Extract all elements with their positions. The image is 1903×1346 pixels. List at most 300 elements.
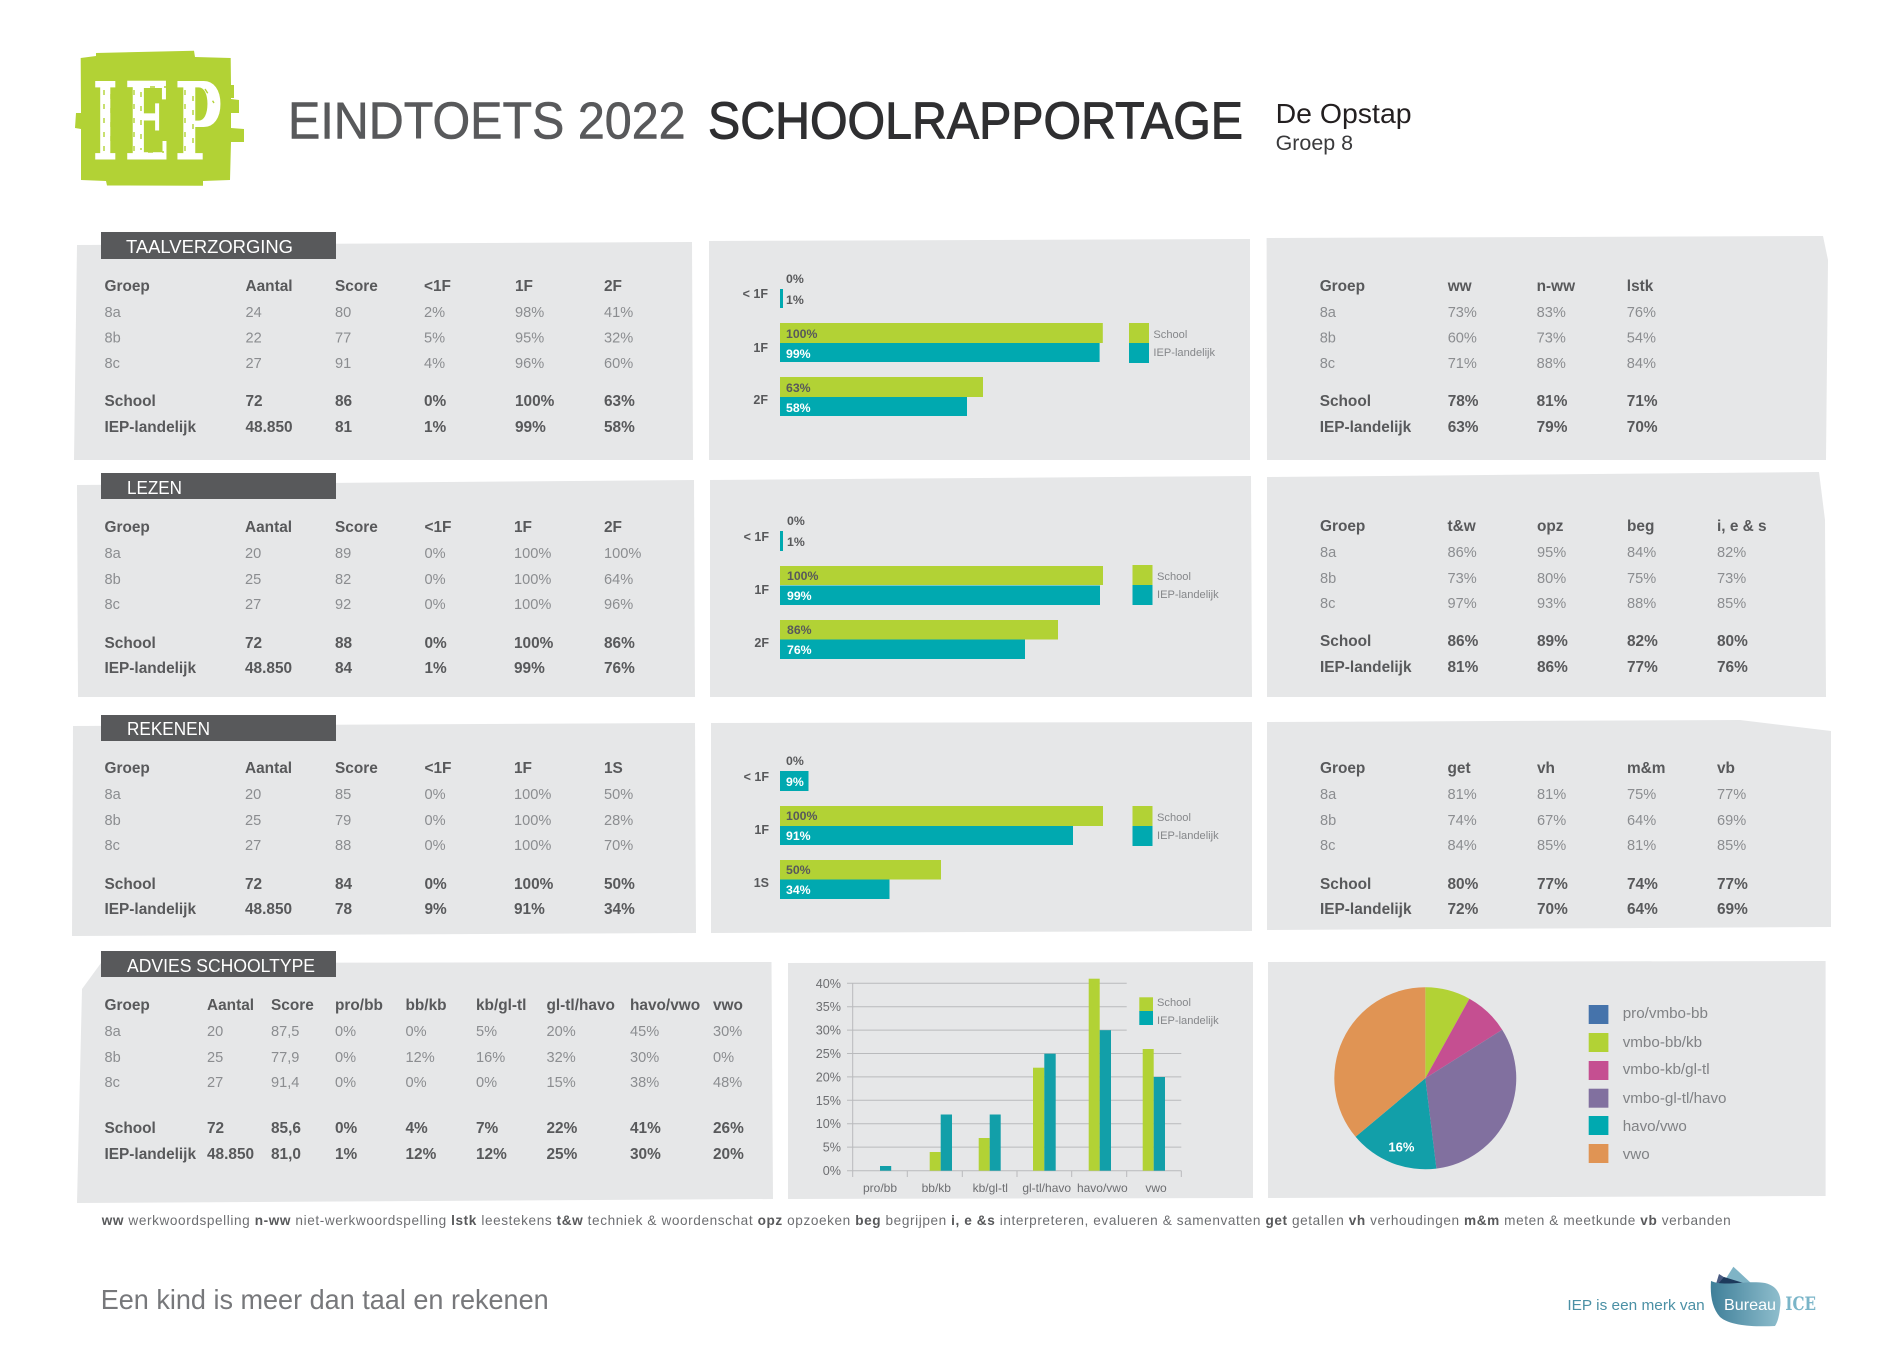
- panel: lezen bar chart: [710, 476, 1252, 697]
- panel: rekenen table: <1F: [424, 760, 451, 777]
- panel: rekenen table: School: [104, 876, 156, 893]
- panel: rekenen table: Aantal: [245, 760, 292, 777]
- panel: advies schooltype table: 30%: [713, 1024, 742, 1040]
- panel: taalverzorging subscores: 8b: [1320, 330, 1336, 346]
- panel: taalverzorging subscores: Groep: [1320, 278, 1365, 295]
- panel: rekenen subscores: 69%: [1717, 813, 1746, 829]
- panel: advies schooltype table: 30%: [630, 1050, 659, 1066]
- panel: advies schooltype table: 8c: [104, 1075, 120, 1091]
- panel: taalverzorging subscores: 8a: [1320, 305, 1337, 321]
- panel: advies schooltype table: 77,9: [271, 1050, 299, 1066]
- panel: lezen table: 100%: [514, 597, 551, 613]
- panel: rekenen subscores: [1267, 720, 1831, 930]
- panel: advies column chart: School: [1157, 997, 1191, 1009]
- panel: rekenen table: 0%: [424, 838, 446, 854]
- brand line and Bureau ICE logo: Bureau: [1724, 1297, 1776, 1314]
- panel: rekenen bar chart: 100%: [786, 809, 818, 823]
- panel: advies schooltype table: 72: [207, 1120, 224, 1137]
- panel: lezen table: 2F: [604, 519, 622, 536]
- panel: taalverzorging table: Groep: [104, 278, 150, 295]
- panel: lezen table: 86%: [604, 635, 635, 652]
- panel: rekenen table: 100%: [514, 813, 551, 829]
- panel: advies schooltype table: 0%: [406, 1024, 427, 1040]
- panel: rekenen subscores: 64%: [1627, 813, 1656, 829]
- panel: rekenen table: 48.850: [245, 901, 292, 918]
- panel: rekenen subscores: 69%: [1717, 901, 1748, 918]
- panel: rekenen table: 0%: [424, 813, 446, 829]
- panel: advies column chart: pro/bb: [863, 1181, 897, 1195]
- panel: rekenen subscores: 8b: [1320, 813, 1336, 829]
- panel: advies column chart: 20%: [816, 1070, 841, 1084]
- panel: rekenen subscores: vb: [1717, 760, 1735, 777]
- school name: De Opstap: [1276, 98, 1412, 129]
- panel: advies schooltype table: [77, 951, 773, 1203]
- panel: advies schooltype table: 91,4: [271, 1075, 299, 1091]
- panel: advies column chart: 40%: [816, 977, 841, 991]
- panel: pie chart: havo/vwo: [1623, 1118, 1687, 1135]
- panel: lezen subscores: [1267, 472, 1826, 697]
- panel: taalverzorging table: 63%: [604, 393, 635, 410]
- panel: lezen table: School: [104, 635, 156, 652]
- panel: rekenen table: 34%: [604, 901, 635, 918]
- panel: advies schooltype table: gl-tl/havo: [546, 997, 615, 1014]
- panel: lezen subscores: 80%: [1717, 633, 1748, 650]
- panel: lezen table: 96%: [604, 597, 633, 613]
- panel: taalverzorging subscores: lstk: [1627, 278, 1654, 295]
- panel: taalverzorging table: 58%: [604, 419, 635, 436]
- panel: taalverzorging table: 60%: [604, 356, 633, 372]
- panel: taalverzorging subscores: ww: [1447, 278, 1472, 295]
- panel: rekenen subscores: 8c: [1320, 838, 1335, 854]
- panel: rekenen bar chart: 0%: [786, 754, 804, 768]
- panel: lezen bar chart: 76%: [787, 643, 812, 657]
- panel: taalverzorging subscores: 60%: [1448, 330, 1477, 346]
- panel: advies schooltype table: 15%: [546, 1075, 576, 1091]
- panel: rekenen table: 8b: [104, 813, 121, 829]
- panel: taalverzorging subscores: 84%: [1627, 356, 1656, 372]
- panel: lezen table: 100%: [514, 635, 554, 652]
- logo: IEP: P: [174, 59, 222, 185]
- panel: lezen table: 8b: [104, 572, 121, 588]
- panel: taalverzorging table: <1F: [424, 278, 451, 295]
- logo: IEP: I: [93, 59, 118, 185]
- panel: advies schooltype table: 25: [207, 1050, 223, 1066]
- panel: lezen subscores: School: [1320, 633, 1371, 650]
- panel: lezen bar chart: 1%: [787, 535, 805, 549]
- panel: rekenen subscores: 84%: [1448, 838, 1477, 854]
- panel: taalverzorging table: 77: [335, 330, 351, 346]
- panel: advies schooltype table: 0%: [713, 1050, 734, 1066]
- panel: lezen subscores: 86%: [1537, 659, 1568, 676]
- panel: taalverzorging subscores: 83%: [1537, 305, 1566, 321]
- panel: advies schooltype table: 48%: [713, 1075, 742, 1091]
- panel: advies schooltype table: havo/vwo: [630, 997, 700, 1014]
- panel: rekenen table: 9%: [424, 901, 447, 918]
- panel: advies schooltype table: 85,6: [271, 1120, 301, 1137]
- panel: lezen bar chart: 86%: [787, 623, 812, 637]
- panel: rekenen table: 84: [335, 876, 353, 893]
- panel: lezen table: Aantal: [245, 519, 292, 536]
- panel: lezen table: 27: [245, 597, 261, 613]
- panel: rekenen table: 100%: [514, 787, 551, 803]
- panel: lezen table: 100%: [514, 572, 551, 588]
- panel: pie chart: vmbo-kb/gl-tl: [1623, 1061, 1710, 1078]
- panel: lezen subscores: 85%: [1717, 596, 1746, 612]
- panel: lezen table: 20: [245, 546, 261, 562]
- panel: lezen table: 84: [335, 660, 353, 677]
- panel: taalverzorging table: 2F: [604, 278, 622, 295]
- panel: advies schooltype table: 7%: [476, 1120, 499, 1137]
- panel: lezen bar chart: IEP-landelijk: [1157, 589, 1219, 601]
- panel: rekenen table: 70%: [604, 838, 633, 854]
- panel: taalverzorging table: 8c: [104, 356, 120, 372]
- panel: rekenen table: 25: [245, 813, 261, 829]
- panel: lezen bar chart: 99%: [787, 589, 812, 603]
- panel: advies schooltype table: bb/kb: [406, 997, 447, 1014]
- panel: advies schooltype table: 25%: [546, 1146, 578, 1163]
- panel: advies column chart: 25%: [816, 1047, 841, 1061]
- panel: advies schooltype table: 45%: [630, 1024, 659, 1040]
- panel: rekenen subscores: 74%: [1448, 813, 1477, 829]
- panel: rekenen table: 28%: [604, 813, 633, 829]
- panel: advies column chart: kb/gl-tl: [973, 1181, 1008, 1195]
- panel: advies column chart: 15%: [816, 1094, 841, 1108]
- panel: lezen table: 0%: [424, 597, 446, 613]
- panel: advies schooltype table: 38%: [630, 1075, 659, 1091]
- panel: advies column chart: bb/kb: [922, 1181, 951, 1195]
- panel: pie chart: [1268, 961, 1826, 1198]
- panel: rekenen subscores: 85%: [1717, 838, 1746, 854]
- panel: lezen table: Groep: [104, 519, 150, 536]
- panel: lezen subscores: 97%: [1448, 596, 1477, 612]
- panel: rekenen bar chart: School: [1157, 812, 1191, 824]
- panel: rekenen subscores: 72%: [1448, 901, 1479, 918]
- panel: advies schooltype table: 12%: [406, 1050, 435, 1066]
- panel: taalverzorging table: 41%: [604, 305, 633, 321]
- panel: taalverzorging bar chart: 1F: [753, 341, 768, 355]
- panel: lezen subscores: 82%: [1627, 633, 1658, 650]
- panel: lezen table: LEZEN: [127, 478, 182, 498]
- panel: taalverzorging subscores: n-ww: [1537, 278, 1575, 295]
- panel: lezen subscores: 81%: [1448, 659, 1479, 676]
- panel: advies schooltype table: 81,0: [271, 1146, 301, 1163]
- panel: taalverzorging table: 98%: [515, 305, 544, 321]
- panel: rekenen subscores: 81%: [1448, 787, 1477, 803]
- panel: advies column chart: gl-tl/havo: [1022, 1181, 1071, 1195]
- panel: rekenen table: 88: [335, 838, 351, 854]
- abbreviation legend: ww werkwoordspelling n-ww niet-werkwoordspelling lstk leestekens t&w techniek & woordenschat opz opzoeken beg begrijpen i, e &s interpreteren, evalueren & samenvatten get getallen vh verhoudingen m&m meten & meetkunde vb verbanden: [101, 1213, 1731, 1228]
- title: EINDTOETS 2022: [288, 92, 686, 150]
- panel: rekenen subscores: 77%: [1537, 876, 1568, 893]
- panel: taalverzorging table: Aantal: [246, 278, 293, 295]
- panel: advies column chart: 5%: [823, 1140, 841, 1154]
- panel: rekenen table: 100%: [514, 876, 554, 893]
- panel: taalverzorging subscores: IEP-landelijk: [1320, 419, 1412, 436]
- panel: lezen table: 100%: [604, 546, 641, 562]
- panel: lezen subscores: 80%: [1537, 571, 1566, 587]
- panel: advies schooltype table: ADVIES SCHOOLTYPE: [127, 956, 315, 976]
- logo: IEP: E: [124, 59, 170, 185]
- panel: taalverzorging table: 100%: [515, 393, 555, 410]
- panel: rekenen bar chart: 1S: [754, 876, 769, 890]
- panel: lezen subscores: 86%: [1448, 633, 1479, 650]
- panel: taalverzorging bar chart: [709, 239, 1250, 460]
- panel: advies schooltype table: vwo: [713, 997, 743, 1014]
- panel: advies schooltype table: 0%: [335, 1024, 356, 1040]
- panel: rekenen table: 91%: [514, 901, 545, 918]
- panel: advies schooltype table: 0%: [335, 1120, 358, 1137]
- panel: rekenen subscores: 67%: [1537, 813, 1566, 829]
- panel: taalverzorging subscores: 54%: [1627, 330, 1656, 346]
- panel: rekenen bar chart: 34%: [786, 883, 811, 897]
- panel: rekenen subscores: 74%: [1627, 876, 1658, 893]
- panel: rekenen subscores: 75%: [1627, 787, 1656, 803]
- panel: advies column chart: 30%: [816, 1024, 841, 1038]
- panel: rekenen table: 72: [245, 876, 262, 893]
- panel: taalverzorging table: 8b: [104, 330, 121, 346]
- panel: lezen subscores: i, e & s: [1717, 518, 1767, 535]
- panel: pie chart: vwo: [1623, 1146, 1650, 1163]
- panel: lezen bar chart: 1F: [754, 583, 769, 597]
- panel: lezen table: 1%: [424, 660, 447, 677]
- panel: lezen table: 82: [335, 572, 351, 588]
- panel: taalverzorging bar chart: School: [1153, 329, 1187, 341]
- logo: IEP: [75, 51, 244, 186]
- panel: rekenen table: 0%: [424, 876, 447, 893]
- panel: rekenen subscores: 81%: [1627, 838, 1656, 854]
- title: [288, 92, 1243, 150]
- panel: lezen subscores: IEP-landelijk: [1320, 659, 1412, 676]
- panel: lezen table: [77, 473, 695, 697]
- panel: rekenen subscores: 81%: [1537, 787, 1566, 803]
- panel: lezen table: 0%: [424, 546, 446, 562]
- panel: advies schooltype table: 0%: [335, 1075, 356, 1091]
- panel: lezen subscores: 75%: [1627, 571, 1656, 587]
- panel: taalverzorging subscores: 71%: [1448, 356, 1477, 372]
- panel: taalverzorging bar chart: 1%: [786, 293, 804, 307]
- panel: taalverzorging subscores: 81%: [1537, 393, 1568, 410]
- panel: lezen subscores: 8c: [1320, 596, 1335, 612]
- panel: rekenen table: REKENEN: [127, 719, 210, 739]
- panel: rekenen bar chart: < 1F: [744, 770, 769, 784]
- panel: advies schooltype table: kb/gl-tl: [476, 997, 526, 1014]
- panel: lezen table: 72: [245, 635, 262, 652]
- panel: pie chart: pro/vmbo-bb: [1623, 1005, 1708, 1022]
- panel: taalverzorging table: 8a: [104, 305, 122, 321]
- panel: rekenen table: 1F: [514, 760, 532, 777]
- panel: lezen table: IEP-landelijk: [104, 660, 196, 677]
- panel: taalverzorging table: 72: [246, 393, 263, 410]
- group name: Groep 8: [1276, 132, 1353, 155]
- panel: advies column chart: havo/vwo: [1077, 1181, 1128, 1195]
- panel: rekenen table: 79: [335, 813, 351, 829]
- panel: advies schooltype table: 8a: [104, 1024, 122, 1040]
- panel: rekenen table: 20: [245, 787, 261, 803]
- panel: rekenen bar chart: [711, 722, 1252, 933]
- panel: rekenen table: 1S: [604, 760, 623, 777]
- panel: lezen bar chart: < 1F: [744, 530, 769, 544]
- panel: taalverzorging table: 81: [335, 419, 353, 436]
- panel: taalverzorging table: 95%: [515, 330, 544, 346]
- panel: taalverzorging subscores: 78%: [1448, 393, 1479, 410]
- panel: taalverzorging table: School: [104, 393, 156, 410]
- panel: advies schooltype table: Score: [271, 997, 314, 1014]
- panel: taalverzorging subscores: 63%: [1448, 419, 1479, 436]
- panel: advies schooltype table: 20%: [546, 1024, 576, 1040]
- panel: taalverzorging subscores: 71%: [1627, 393, 1658, 410]
- panel: taalverzorging table: 96%: [515, 356, 544, 372]
- panel: advies schooltype table: Aantal: [207, 997, 254, 1014]
- panel: taalverzorging table: TAALVERZORGING: [126, 237, 293, 257]
- panel: rekenen subscores: 85%: [1537, 838, 1566, 854]
- panel: taalverzorging table: IEP-landelijk: [104, 419, 196, 436]
- panel: taalverzorging subscores: 79%: [1537, 419, 1568, 436]
- panel: taalverzorging table: 27: [246, 356, 262, 372]
- title: SCHOOLRAPPORTAGE: [708, 92, 1243, 150]
- panel: lezen subscores: 77%: [1627, 659, 1658, 676]
- panel: lezen table: 100%: [514, 546, 551, 562]
- panel: advies schooltype table: 12%: [476, 1146, 507, 1163]
- panel: lezen table: 88: [335, 635, 353, 652]
- panel: advies schooltype table: School: [104, 1120, 156, 1137]
- panel: rekenen subscores: vh: [1537, 760, 1555, 777]
- panel: advies schooltype table: 26%: [713, 1120, 744, 1137]
- panel: advies column chart: IEP-landelijk: [1157, 1015, 1219, 1027]
- panel: taalverzorging table: 32%: [604, 330, 633, 346]
- panel: taalverzorging table: [74, 232, 693, 460]
- panel: lezen subscores: 8b: [1320, 571, 1336, 587]
- panel: rekenen subscores: Groep: [1320, 760, 1365, 777]
- panel: rekenen bar chart: IEP-landelijk: [1157, 830, 1219, 842]
- tagline: Een kind is meer dan taal en rekenen: [101, 1284, 549, 1315]
- panel: taalverzorging table: 1%: [424, 419, 447, 436]
- brand line and Bureau ICE logo: [1567, 1267, 1816, 1326]
- panel: taalverzorging table: 80: [335, 305, 351, 321]
- panel: lezen subscores: 93%: [1537, 596, 1566, 612]
- panel: lezen table: Score: [335, 519, 378, 536]
- panel: rekenen bar chart: 1F: [754, 823, 769, 837]
- panel: taalverzorging bar chart: 99%: [786, 347, 811, 361]
- panel: advies schooltype table: Groep: [104, 997, 150, 1014]
- panel: lezen subscores: beg: [1627, 518, 1654, 535]
- panel: lezen table: 99%: [514, 660, 545, 677]
- panel: advies schooltype table: 0%: [476, 1075, 497, 1091]
- panel: lezen subscores: 88%: [1627, 596, 1656, 612]
- panel: lezen subscores: Groep: [1320, 518, 1365, 535]
- panel: taalverzorging bar chart: 58%: [786, 401, 811, 415]
- panel: rekenen table: Groep: [104, 760, 150, 777]
- panel: rekenen table: Score: [335, 760, 378, 777]
- panel: advies schooltype table: 41%: [630, 1120, 661, 1137]
- panel: rekenen subscores: 8a: [1320, 787, 1337, 803]
- panel: rekenen subscores: 70%: [1537, 901, 1568, 918]
- panel: advies schooltype table: 12%: [406, 1146, 437, 1163]
- panel: taalverzorging bar chart: 0%: [786, 272, 804, 286]
- panel: taalverzorging subscores: 8c: [1320, 356, 1335, 372]
- panel: taalverzorging table: 99%: [515, 419, 546, 436]
- panel: lezen table: <1F: [424, 519, 451, 536]
- panel: taalverzorging bar chart: 63%: [786, 381, 811, 395]
- panel: lezen table: 89: [335, 546, 351, 562]
- panel: taalverzorging table: 91: [335, 356, 351, 372]
- panel: rekenen subscores: get: [1448, 760, 1471, 777]
- panel: lezen table: 0%: [424, 635, 447, 652]
- panel: taalverzorging table: 22: [246, 330, 262, 346]
- panel: advies schooltype table: 20%: [713, 1146, 744, 1163]
- panel: rekenen table: 0%: [424, 787, 446, 803]
- panel: taalverzorging bar chart: < 1F: [743, 287, 768, 301]
- panel: pie chart: 16%: [1388, 1140, 1415, 1155]
- panel: advies column chart: [788, 962, 1253, 1199]
- panel: advies schooltype table: 16%: [476, 1050, 505, 1066]
- panel: lezen table: 64%: [604, 572, 633, 588]
- panel: lezen subscores: 76%: [1717, 659, 1748, 676]
- panel: rekenen table: IEP-landelijk: [104, 901, 196, 918]
- panel: rekenen subscores: School: [1320, 876, 1371, 893]
- brand line and Bureau ICE logo: IEP is een merk van: [1567, 1297, 1705, 1314]
- panel: advies schooltype table: 32%: [546, 1050, 576, 1066]
- panel: rekenen subscores: 77%: [1717, 787, 1746, 803]
- panel: taalverzorging subscores: [1267, 236, 1828, 460]
- panel: taalverzorging table: Score: [335, 278, 378, 295]
- panel: advies schooltype table: IEP-landelijk: [104, 1146, 196, 1163]
- panel: taalverzorging table: 2%: [424, 305, 445, 321]
- panel: advies column chart: 10%: [816, 1117, 841, 1131]
- panel: advies schooltype table: 0%: [406, 1075, 427, 1091]
- panel: rekenen subscores: m&m: [1627, 760, 1665, 777]
- panel: advies schooltype table: 22%: [546, 1120, 578, 1137]
- panel: lezen subscores: 82%: [1717, 545, 1746, 561]
- panel: advies schooltype table: 87,5: [271, 1024, 299, 1040]
- panel: taalverzorging subscores: 70%: [1627, 419, 1658, 436]
- panel: taalverzorging subscores: 88%: [1537, 356, 1566, 372]
- panel: advies schooltype table: 20: [207, 1024, 223, 1040]
- panel: taalverzorging subscores: 76%: [1627, 305, 1656, 321]
- panel: rekenen table: 50%: [604, 787, 633, 803]
- panel: lezen subscores: opz: [1537, 518, 1564, 535]
- panel: rekenen subscores: 64%: [1627, 901, 1658, 918]
- panel: taalverzorging table: 48.850: [246, 419, 293, 436]
- panel: lezen table: 76%: [604, 660, 635, 677]
- panel: advies column chart: 0%: [823, 1164, 841, 1178]
- brand line and Bureau ICE logo: ICE: [1785, 1294, 1816, 1315]
- panel: lezen subscores: t&w: [1448, 518, 1476, 535]
- panel: rekenen subscores: 77%: [1717, 876, 1748, 893]
- panel: rekenen table: 85: [335, 787, 351, 803]
- panel: taalverzorging table: 4%: [424, 356, 445, 372]
- panel: advies schooltype table: 4%: [406, 1120, 428, 1137]
- panel: lezen table: 1F: [514, 519, 532, 536]
- panel: rekenen subscores: 80%: [1448, 876, 1479, 893]
- panel: taalverzorging bar chart: 100%: [786, 327, 818, 341]
- panel: advies schooltype table: 0%: [335, 1050, 356, 1066]
- panel: pie chart: vmbo-bb/kb: [1623, 1034, 1702, 1051]
- panel: lezen subscores: 84%: [1627, 545, 1656, 561]
- panel: rekenen subscores: IEP-landelijk: [1320, 901, 1412, 918]
- panel: rekenen table: 78: [335, 901, 353, 918]
- panel: lezen bar chart: School: [1157, 571, 1191, 583]
- panel: lezen table: 48.850: [245, 660, 292, 677]
- panel: lezen subscores: 73%: [1717, 571, 1746, 587]
- panel: taalverzorging subscores: 73%: [1448, 305, 1477, 321]
- panel: rekenen table: 100%: [514, 838, 551, 854]
- panel: advies schooltype table: 5%: [476, 1024, 497, 1040]
- panel: taalverzorging subscores: 73%: [1537, 330, 1566, 346]
- panel: taalverzorging bar chart: 2F: [753, 393, 768, 407]
- panel: advies column chart: vwo: [1145, 1181, 1167, 1195]
- panel: lezen subscores: 73%: [1448, 571, 1477, 587]
- panel: lezen subscores: 89%: [1537, 633, 1568, 650]
